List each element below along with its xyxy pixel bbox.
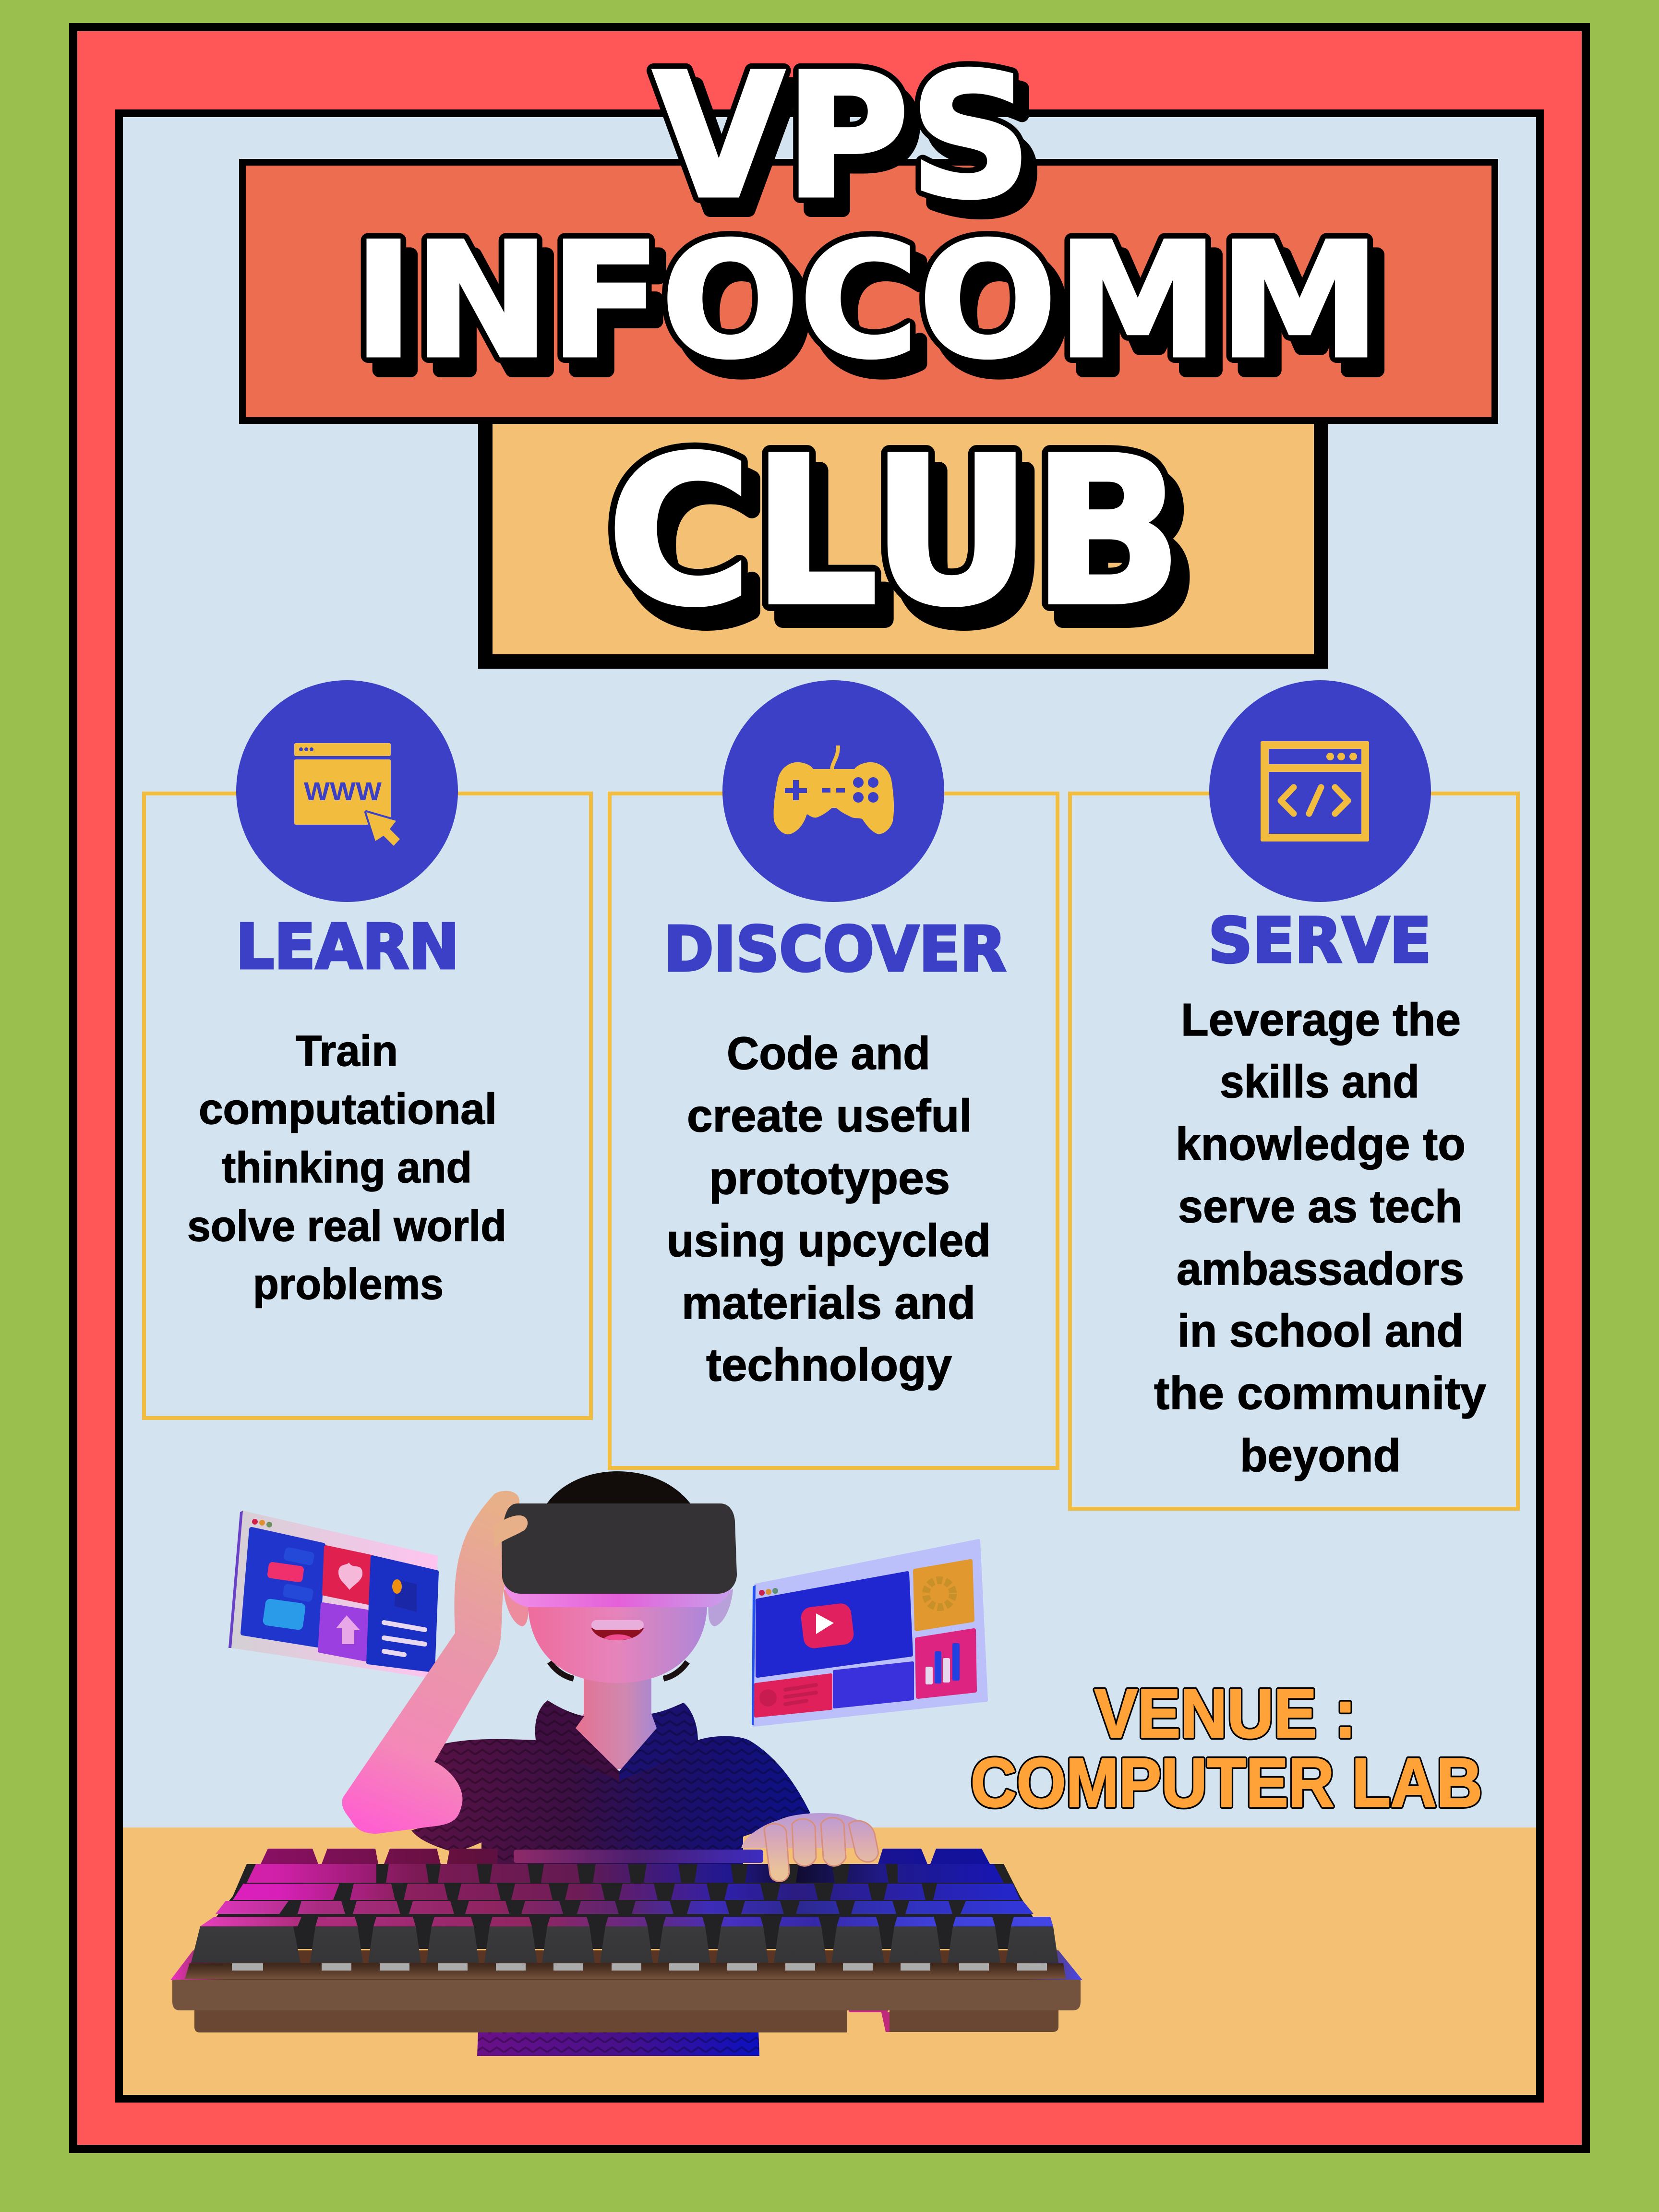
serve heading: SERVE: [1208, 905, 1431, 977]
discover description: technology: [706, 1339, 952, 1391]
VR headset strap: [504, 1584, 733, 1607]
face: [528, 1601, 707, 1683]
serve description: beyond: [1240, 1430, 1401, 1481]
title line: INFOCOMM: INFOCOMM: [353, 209, 1381, 393]
learn description: problems: [253, 1261, 444, 1309]
title line: CLUB: CLUB: [607, 414, 1183, 651]
key switches: [232, 1963, 1047, 1971]
learn description: [187, 1027, 506, 1309]
row 2 keys: [247, 1864, 1004, 1883]
title line: VPS: VPS: [653, 37, 1032, 237]
venue text: COMPUTER LAB: [971, 1744, 1482, 1821]
inner light blue panel: [119, 113, 1540, 2099]
serve description: knowledge to: [1176, 1118, 1466, 1170]
illustration: person in VR headset at keyboard: [342, 1471, 810, 2056]
title line: INFOCOMM: INFOCOMM: [353, 209, 1381, 393]
discover description: Code and: [727, 1028, 930, 1079]
venue text: [971, 1675, 1482, 1821]
learn heading: LEARN: [236, 911, 459, 983]
collar: [535, 1700, 698, 1781]
serve description: Leverage the: [1181, 994, 1461, 1046]
discover description: materials and: [682, 1277, 975, 1329]
ears: [504, 1589, 733, 1626]
venue text: VENUE :: [1094, 1675, 1356, 1752]
discover card border: [610, 793, 1058, 1468]
floating window: social apps: [228, 1511, 438, 1678]
learn description: computational: [199, 1085, 497, 1133]
neck: [574, 1675, 660, 1769]
serve description: serve as tech: [1178, 1181, 1462, 1232]
row 4 keys: [216, 1901, 1034, 1914]
venue text: VENUE :: [1094, 1675, 1356, 1752]
row 3 keys: [233, 1884, 1020, 1900]
infocomm box: red-orange: [242, 162, 1495, 421]
table surface: [119, 1827, 1540, 2099]
sweater hem below keyboard: [477, 2031, 759, 2056]
row 5 key fronts: [191, 1926, 1058, 1963]
serve description: ambassadors: [1177, 1243, 1464, 1295]
title line: VPS: VPS: [653, 37, 1032, 237]
VR headset: [502, 1503, 737, 1594]
icon: code window: [1209, 680, 1431, 902]
title line: CLUB: CLUB: [619, 431, 1195, 668]
learn card border: [144, 793, 591, 1418]
row 1 keys: [261, 1849, 990, 1864]
title line: CLUB: CLUB: [607, 414, 1183, 651]
discover description: [667, 1028, 991, 1391]
keyboard notch highlights: [847, 2008, 890, 2032]
title line: VPS: VPS: [663, 51, 1043, 251]
learn description: Train: [296, 1027, 398, 1075]
mouth: [591, 1620, 644, 1640]
keyboard tray: [170, 1950, 1082, 1980]
title line: INFOCOMM: INFOCOMM: [365, 223, 1392, 408]
row 5 key tops: [200, 1917, 1053, 1926]
keyboard inner tray: [185, 1963, 1066, 1979]
venue text: COMPUTER LAB: [971, 1744, 1482, 1821]
serve description: in school and: [1178, 1305, 1464, 1357]
icon: www browser with cursor: [236, 680, 458, 902]
keyboard base lower: [194, 2010, 1058, 2032]
discover heading: DISCOVER: [664, 914, 1006, 986]
panel: learn: [144, 680, 591, 1418]
discover description: using upcycled: [667, 1215, 991, 1266]
keyboard front wall: [172, 1980, 1081, 2010]
serve description: the community: [1154, 1368, 1486, 1419]
learn description: thinking and: [222, 1144, 472, 1192]
keyboard: [170, 1849, 1082, 2032]
key backing: [197, 1864, 1051, 1949]
learn description: solve real world: [187, 1202, 506, 1250]
panel: discover: [610, 680, 1058, 1468]
floating window: video dashboard: [752, 1540, 986, 1725]
serve card border: [1070, 793, 1518, 1509]
discover description: create useful: [687, 1090, 972, 1142]
discover description: prototypes: [709, 1153, 950, 1204]
index finger on headset: [493, 1515, 528, 1548]
icon: game controller: [722, 680, 944, 902]
club box: orange: [485, 413, 1321, 661]
hair: [544, 1471, 693, 1679]
title: [353, 37, 1392, 668]
sweater torso: [411, 1736, 810, 1867]
icon: www browser with cursor: WWW: [304, 777, 382, 806]
serve description: [1154, 994, 1486, 1481]
serve description: skills and: [1220, 1056, 1419, 1107]
right hand on keyboard: [741, 1813, 878, 1881]
inner frame border: [119, 113, 1540, 2099]
arm and hand: [342, 1491, 519, 1834]
panel: serve: [1070, 680, 1518, 1509]
